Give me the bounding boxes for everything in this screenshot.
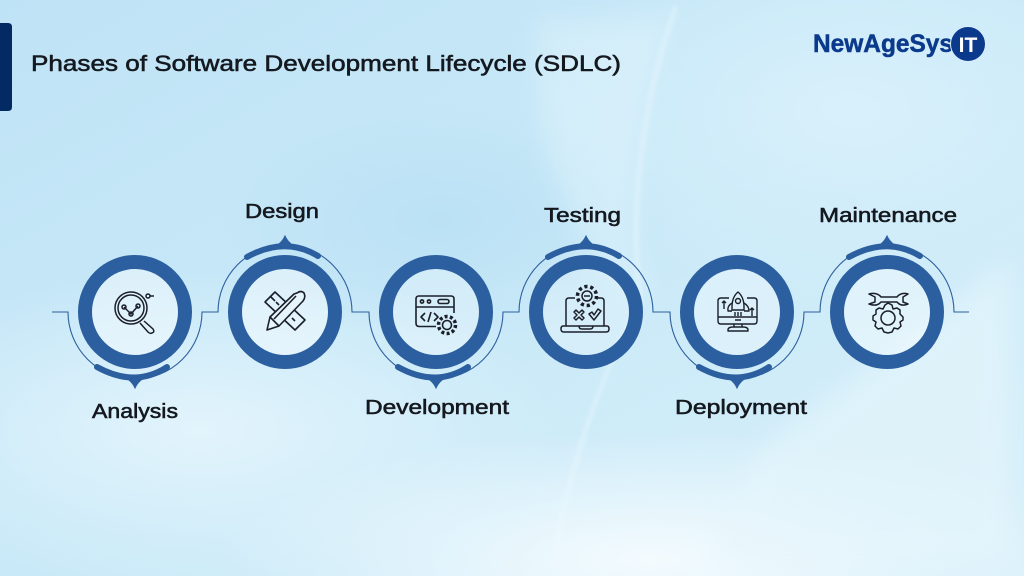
label: Analysis: Analysis bbox=[92, 401, 178, 423]
icon: monitor with rocket bbox=[718, 292, 757, 331]
step 2: Design bbox=[235, 201, 335, 362]
icon: pencil and ruler bbox=[265, 292, 305, 330]
accent tab bbox=[0, 23, 12, 111]
step 5: Deployment bbox=[675, 262, 808, 419]
logo: NewAgeSys bbox=[813, 30, 953, 58]
icon: laptop with gear bbox=[561, 286, 609, 332]
label: Development: Development bbox=[365, 397, 510, 419]
label: Testing: Testing bbox=[544, 205, 621, 227]
label: Design: Design bbox=[245, 201, 319, 223]
connector line bbox=[52, 245, 969, 379]
label: Maintenance: Maintenance bbox=[819, 205, 957, 227]
step 6: Maintenance bbox=[819, 205, 957, 362]
icon: wrench and gear bbox=[869, 293, 908, 333]
logo bbox=[813, 26, 986, 62]
icon: code window with gear bbox=[416, 296, 456, 334]
icon: magnifier with chart bbox=[115, 292, 154, 333]
logo: IT bbox=[959, 34, 977, 57]
title: Phases of Software Development Lifecycle (SDLC) bbox=[31, 51, 621, 76]
step 3: Development bbox=[365, 262, 510, 419]
step 4: Testing bbox=[536, 205, 636, 362]
label: Deployment: Deployment bbox=[675, 397, 808, 419]
step 1: Analysis bbox=[85, 262, 185, 423]
